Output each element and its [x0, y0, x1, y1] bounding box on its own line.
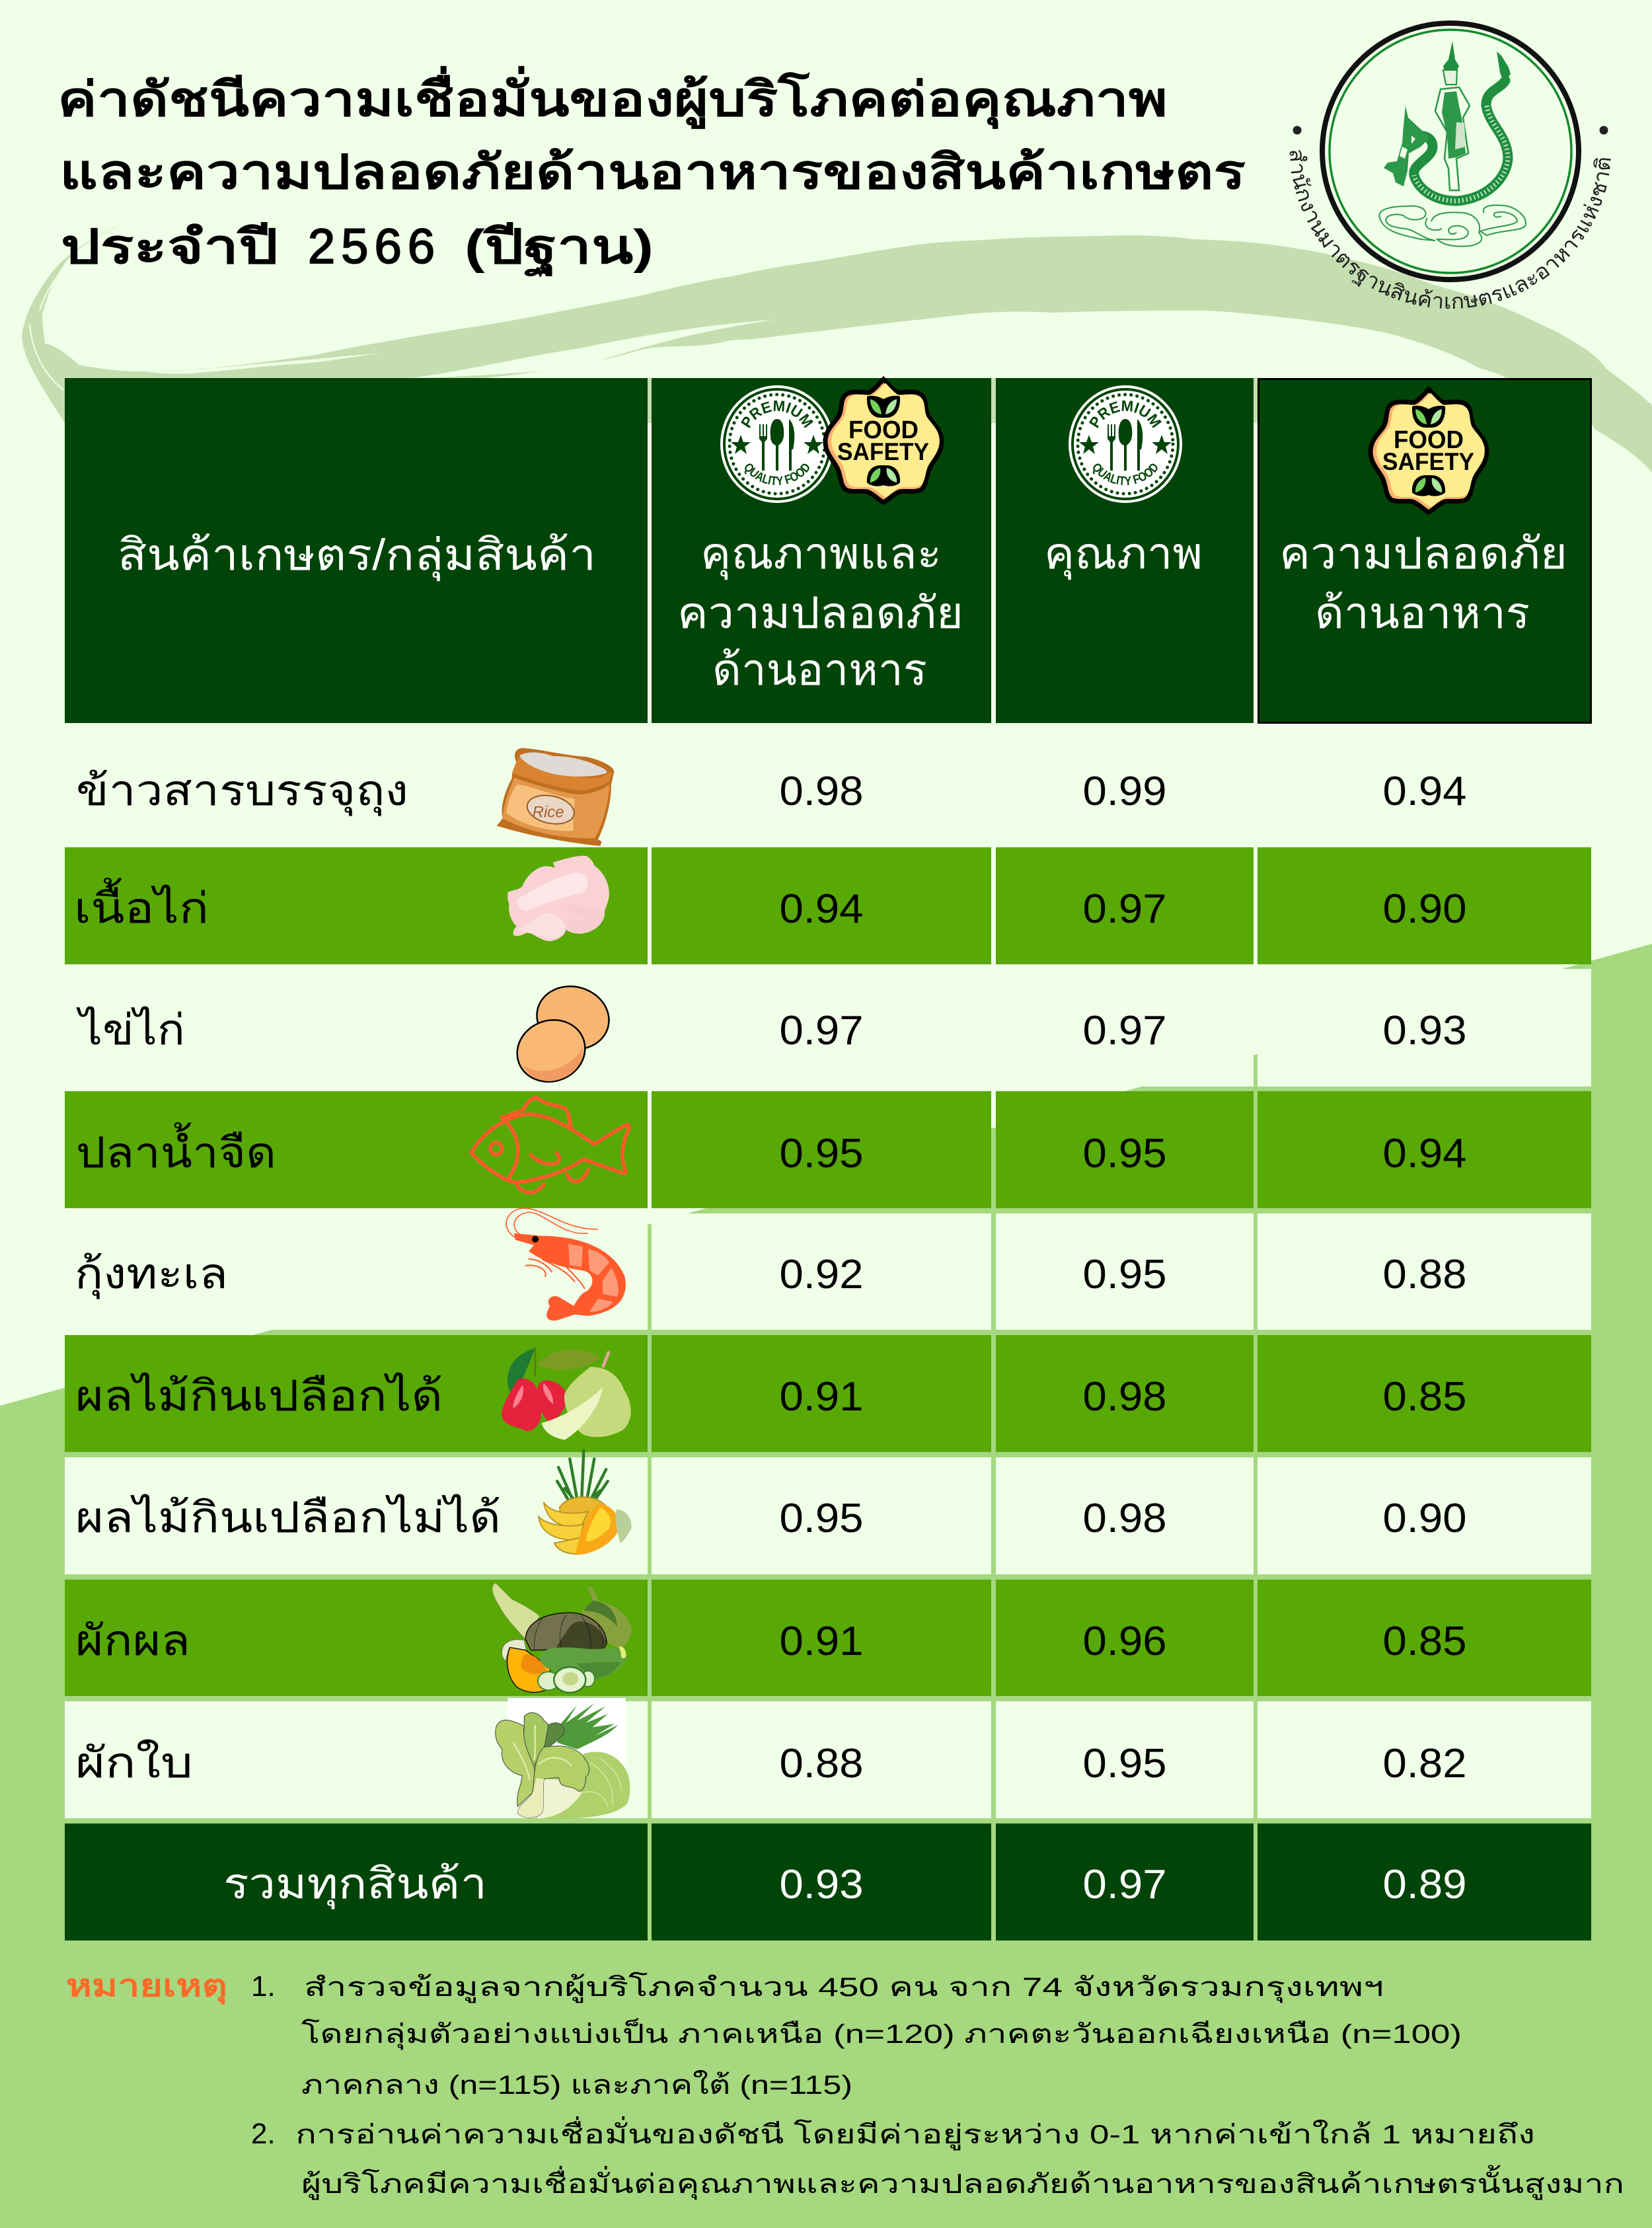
icon: fish outline — [471, 1098, 629, 1192]
header cell: quality: คุณภาพ — [1044, 529, 1203, 580]
row: edible peel fruit: 0.91 — [780, 1374, 863, 1420]
row: freshwater fish: 0.95 — [780, 1131, 863, 1176]
row: edible peel fruit — [65, 1335, 1591, 1452]
header cell: food safety — [1258, 379, 1591, 723]
row: chicken eggs: 0.97 — [1082, 1008, 1167, 1054]
background: lower green area — [0, 944, 1652, 2228]
icon: premium quality food badge: QUALITY FOOD — [744, 464, 809, 485]
row: all products total: 0.93 — [780, 1862, 863, 1907]
row: chicken meat: เนื้อไก่ — [74, 878, 209, 932]
header cell: product: สินค้าเกษตร/กลุ่มสินค้า — [118, 530, 596, 582]
row: freshwater fish: 0.95 — [1082, 1131, 1167, 1176]
row: edible peel fruit: 0.98 — [1082, 1374, 1167, 1420]
seal rings — [1322, 23, 1579, 280]
title — [57, 65, 1246, 278]
logo: agency seal — [1290, 20, 1611, 309]
row: sea shrimp — [65, 1208, 1591, 1330]
header cell: food safety: ด้านอาหาร — [1315, 588, 1530, 637]
icon: deity standing on naga — [1384, 41, 1511, 201]
footnotes — [66, 1968, 1624, 2200]
row: inedible peel fruit: ผลไม้กินเปลือกไม่ได้ — [75, 1494, 501, 1541]
note 2: การอ่านค่าความเชื่อมั่นของดัชนี โดยมีค่าอยู่ระหว่าง 0-1 หากค่าเข้าใกล้ 1 หมายถึง — [295, 2116, 1535, 2150]
icon: food safety badge: FOOD — [1394, 426, 1464, 454]
row: chicken meat: 0.90 — [1382, 886, 1467, 932]
icon: premium quality food badge — [1069, 385, 1182, 503]
row: packaged rice: 0.98 — [780, 769, 863, 814]
icon: food safety badge: FOOD — [848, 416, 919, 444]
row: chicken eggs: ไข่ไก่ — [76, 1006, 185, 1054]
row: sea shrimp: 0.88 — [1382, 1252, 1467, 1297]
background: brush swoosh — [22, 213, 1652, 473]
icon: food safety badge — [825, 379, 942, 502]
title: และความปลอดภัยด้านอาหารของสินค้าเกษตร — [59, 146, 1246, 199]
row: leafy vegetables: 0.88 — [780, 1741, 863, 1786]
title: (ปีฐาน) — [465, 221, 654, 278]
row: sea shrimp: 0.92 — [780, 1252, 863, 1297]
row: fruit vegetables: 0.96 — [1082, 1619, 1167, 1664]
note 1: สำรวจข้อมูลจากผู้บริโภคจำนวน 450 คน จาก 74 จังหวัดรวมกรุงเทพฯ — [304, 1972, 1384, 2003]
header cell: quality — [996, 378, 1254, 723]
icon: shrimp — [506, 1208, 626, 1321]
row: fruit vegetables — [65, 1580, 1591, 1696]
title: 2566 — [308, 219, 435, 274]
seal text: สำนักงานมาตรฐานสินค้าเกษตรและอาหารแห่งชาติ — [1290, 149, 1611, 309]
row: packaged rice: 0.99 — [1082, 769, 1167, 814]
row: leafy vegetables: 0.82 — [1382, 1741, 1467, 1786]
note 1: ภาคกลาง (n=115) และภาคใต้ (n=115) — [301, 2069, 852, 2100]
row: chicken meat: 0.94 — [780, 886, 863, 932]
icon: pumpkin, cucumber and gourd — [492, 1583, 632, 1693]
icon: rose apple and guava — [502, 1347, 631, 1440]
title: ประจำปี — [61, 221, 278, 274]
row: fruit vegetables: ผักผล — [75, 1617, 190, 1664]
row: edible peel fruit: 0.85 — [1382, 1374, 1467, 1420]
row: all products total: รวมทุกสินค้า — [223, 1860, 487, 1909]
note 2: 2. — [251, 2118, 276, 2150]
note 1: 1. — [251, 1970, 276, 2003]
icon: raw chicken — [507, 856, 609, 941]
icon: rice sack: Rice — [533, 804, 564, 822]
icon: two eggs — [508, 978, 616, 1091]
icon: premium quality food badge: PREMIUM — [741, 401, 813, 428]
icon: food safety badge: SAFETY — [1382, 448, 1474, 475]
row: inedible peel fruit: 0.90 — [1382, 1496, 1467, 1541]
header cell: food safety: ความปลอดภัย — [1279, 529, 1567, 578]
note 1 — [251, 1970, 1462, 2100]
icon: food safety badge: SAFETY — [837, 438, 929, 465]
header cell: quality and food safety: คุณภาพและ — [700, 529, 942, 580]
icon: lettuce, cabbage and herbs — [496, 1698, 630, 1819]
row: chicken eggs: 0.93 — [1382, 1008, 1467, 1054]
row: freshwater fish — [65, 1091, 1591, 1208]
row: sea shrimp: กุ้งทะเล — [75, 1250, 228, 1299]
icon: pineapple, banana and mango — [539, 1451, 632, 1555]
row: packaged rice: ข้าวสารบรรจุถุง — [76, 767, 408, 816]
row: chicken eggs — [65, 969, 1591, 1091]
row: inedible peel fruit — [65, 1451, 1591, 1574]
note 2: ผู้บริโภคมีความเชื่อมั่นต่อคุณภาพและความปลอดภัยด้านอาหารของสินค้าเกษตรนั้นสูงมาก — [301, 2165, 1624, 2200]
note label: หมายเหตุ — [66, 1968, 227, 2005]
note 1: โดยกลุ่มตัวอย่างแบ่งเป็น ภาคเหนือ (n=120) ภาคตะวันออกเฉียงเหนือ (n=100) — [301, 2018, 1462, 2050]
row: freshwater fish: ปลาน้ำจืด — [76, 1122, 276, 1176]
row: all products total: 0.97 — [1082, 1862, 1167, 1907]
icon: premium quality food badge — [720, 385, 831, 503]
row: inedible peel fruit: 0.98 — [1082, 1496, 1167, 1541]
row: freshwater fish: 0.94 — [1382, 1131, 1467, 1176]
row: leafy vegetables: 0.95 — [1082, 1741, 1167, 1786]
row: inedible peel fruit: 0.95 — [780, 1496, 863, 1541]
header cell: quality and food safety: ด้านอาหาร — [712, 645, 927, 694]
header cell: quality and food safety — [652, 376, 991, 723]
row: chicken meat: 0.97 — [1082, 886, 1167, 932]
header cell: product — [65, 378, 648, 723]
title: ค่าดัชนีความเชื่อมั่นของผู้บริโภคต่อคุณภาพ — [57, 65, 1168, 130]
table header row — [65, 376, 1592, 724]
row: packaged rice: 0.94 — [1382, 769, 1467, 814]
row: all products total — [65, 1824, 1591, 1940]
row: all products total: 0.89 — [1382, 1862, 1467, 1907]
icon: premium quality food badge: PREMIUM — [1089, 401, 1162, 428]
row: sea shrimp: 0.95 — [1082, 1252, 1167, 1297]
row: packaged rice — [65, 725, 1591, 846]
row: leafy vegetables — [65, 1698, 1591, 1819]
icon: rice sack — [497, 748, 614, 846]
icon: clouds — [1379, 205, 1526, 247]
row: chicken meat — [65, 847, 1591, 964]
icon: premium quality food badge: QUALITY FOOD — [1093, 464, 1158, 485]
row: fruit vegetables: 0.85 — [1382, 1619, 1467, 1664]
note 2 — [251, 2116, 1624, 2200]
header cell: quality and food safety: ความปลอดภัย — [677, 588, 963, 637]
table — [65, 376, 1592, 1940]
icon: food safety badge — [1370, 389, 1487, 512]
row: fruit vegetables: 0.91 — [780, 1619, 863, 1664]
row: chicken eggs: 0.97 — [780, 1008, 863, 1054]
row: leafy vegetables: ผักใบ — [75, 1739, 193, 1786]
row: edible peel fruit: ผลไม้กินเปลือกได้ — [75, 1372, 443, 1420]
